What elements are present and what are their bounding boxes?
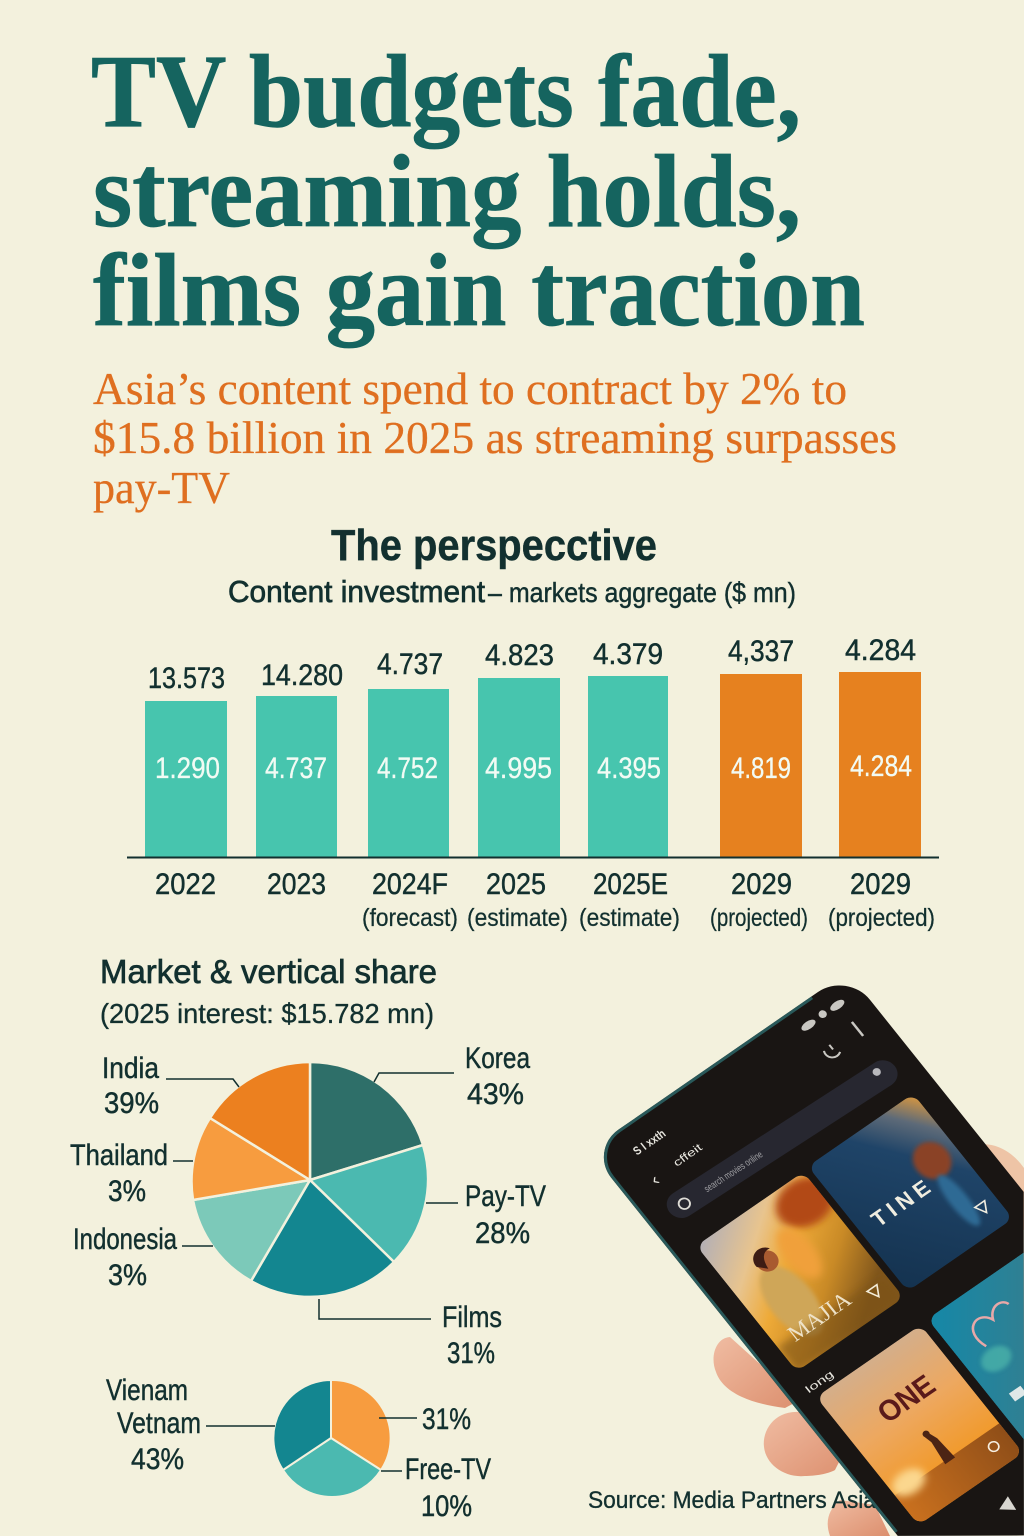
card label: Iong [803, 1369, 837, 1396]
bar 2029 second: 4.284 [850, 750, 912, 783]
label: Pay-TV: 28% [475, 1217, 530, 1250]
slice: Indonesia [193, 1180, 310, 1281]
bar 2025: 4.995 [485, 752, 552, 785]
label: Korea: Korea [465, 1042, 530, 1075]
bar 2022 [145, 662, 227, 901]
label: Films: 31% [447, 1337, 495, 1370]
bar 2022: 13.573 [148, 662, 225, 695]
header text [627, 1115, 708, 1189]
market share heading: Market & vertical share [100, 953, 437, 990]
bar 2029 first: (projected) [710, 904, 808, 932]
card: sunset poster [700, 1176, 900, 1368]
bar 2025: 2025 [486, 868, 546, 901]
bar 2024F [362, 648, 458, 932]
title [91, 34, 865, 348]
label: Vietnam: Vetnam [117, 1407, 201, 1440]
slice: dark teal [273, 1380, 331, 1470]
slice: India [210, 1062, 310, 1180]
bar 2024F: 4.737 [377, 648, 443, 681]
label: India: 39% [104, 1087, 159, 1120]
card: ONE poster: ONE [871, 1369, 942, 1430]
title: TV budgets fade, [91, 34, 801, 149]
label: Pay-TV [426, 1180, 546, 1250]
label: Free-TV: 10% [421, 1490, 472, 1523]
label: 31%: 31% [422, 1403, 471, 1436]
card: blue poster: TINE [866, 1175, 935, 1232]
slice: Korea [310, 1062, 423, 1180]
search bar [661, 1055, 903, 1223]
bar 2025: (estimate) [467, 904, 568, 932]
subtitle: Asia’s content spend to contract by 2% to [93, 364, 847, 414]
bar 2023 [256, 659, 343, 901]
label: Free-TV: Free-TV [405, 1453, 491, 1486]
market share heading: (2025 interest: $15.782 mn) [100, 998, 434, 1029]
bar 2022: 2022 [155, 868, 216, 901]
search bar: search movies online [702, 1149, 766, 1195]
label: Films: Films [442, 1301, 502, 1334]
chart heading: The perspecctive [331, 521, 657, 570]
card: ONE poster [816, 1325, 1023, 1525]
bar 2029 first [710, 635, 808, 932]
bar 2025 [467, 639, 568, 932]
small pie labels [106, 1374, 491, 1523]
bar 2025E: (estimate) [579, 904, 680, 932]
bar 2029 second [828, 634, 935, 932]
bar 2025E: 4.395 [597, 752, 661, 785]
label: Korea: 43% [467, 1078, 524, 1111]
label: Pay-TV: Pay-TV [465, 1180, 546, 1213]
label: Indonesia: 3% [108, 1259, 147, 1292]
label: Indonesia: Indonesia [73, 1223, 177, 1256]
label: Korea [374, 1042, 530, 1111]
bar 2029 first: 4,337 [728, 635, 794, 668]
label: 31% [379, 1403, 471, 1436]
subtitle: $15.8 billion in 2025 as streaming surpasses [93, 413, 897, 463]
chart heading: Content investment [228, 574, 485, 609]
chart heading: – markets aggregate ($ mn) [488, 577, 796, 608]
subtitle: pay-TV [93, 463, 230, 513]
icon: nav triangle [996, 1496, 1018, 1517]
card: sunset poster: MAJIA [783, 1287, 856, 1346]
bar 2023: 4.737 [265, 752, 327, 785]
card: blue poster [808, 1094, 1013, 1291]
subtitle [93, 364, 897, 513]
bar 2029 second: 4.284 [845, 634, 916, 667]
bar 2024F: 4.752 [377, 752, 438, 785]
header text: cffeit [671, 1142, 705, 1169]
bar 2025: 4.823 [485, 639, 554, 672]
title: films gain traction [93, 233, 865, 348]
chart heading [228, 521, 796, 609]
label: Free-TV [381, 1453, 491, 1523]
label: India: India [102, 1052, 159, 1085]
bar 2025E: 4.379 [593, 638, 663, 671]
bar 2029 first: 4.819 [731, 752, 791, 785]
bar 2029 second: 2029 [850, 868, 911, 901]
icon: hand [714, 1144, 1024, 1536]
bar 2024F: 2024F [372, 868, 448, 901]
label: Thailand: Thailand [70, 1139, 168, 1172]
header text: S I xxth [630, 1127, 668, 1158]
bar 2025E: 2025E [593, 868, 668, 901]
bar 2025E [579, 638, 680, 932]
icon: smartphone [589, 972, 1024, 1536]
slice: teal [283, 1438, 381, 1497]
header text: ‹ [646, 1170, 664, 1189]
bar 2022: 1.290 [155, 752, 220, 785]
bar 2029 first: 2029 [731, 868, 792, 901]
title: streaming holds, [93, 134, 801, 249]
label: Thailand [70, 1139, 193, 1208]
label: India [102, 1052, 239, 1120]
bar 2023: 2023 [267, 868, 326, 901]
label: Films [319, 1299, 502, 1370]
bar 2029 second: (projected) [828, 904, 935, 932]
label: Vietnam: Vienam [106, 1374, 188, 1407]
pie chart: market share [192, 1062, 428, 1297]
label: Vietnam [106, 1374, 275, 1476]
slice: Films [251, 1180, 394, 1297]
label: Vietnam: 43% [131, 1443, 184, 1476]
card: teal poster [927, 1253, 1024, 1440]
source: Source: Media Partners Asia [588, 1487, 877, 1514]
bar 2024F: (forecast) [362, 904, 458, 932]
market share heading [100, 953, 437, 1029]
slice: Pay-TV [310, 1145, 428, 1262]
label: Thailand: 3% [108, 1175, 146, 1208]
bar 2023: 14.280 [261, 659, 343, 692]
pie labels [70, 1042, 546, 1370]
status icons [799, 997, 870, 1062]
slice: Thailand [192, 1118, 310, 1200]
bar chart [127, 634, 939, 932]
small pie chart [273, 1380, 391, 1497]
slice: orange [331, 1380, 391, 1470]
label: Indonesia [73, 1223, 213, 1292]
